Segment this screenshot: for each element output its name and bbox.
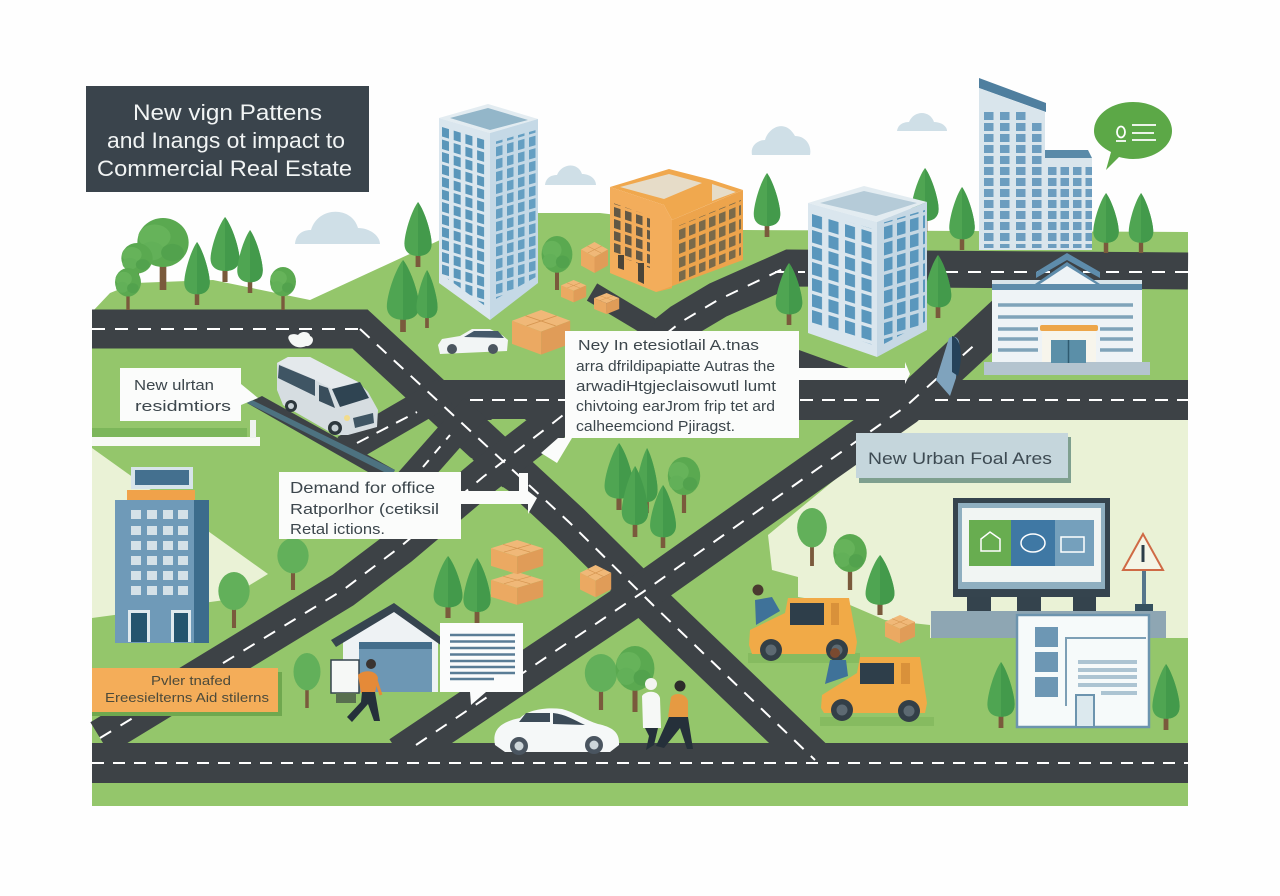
- figure by the road: [936, 336, 961, 396]
- road network: [92, 268, 1188, 763]
- document building: [1017, 615, 1149, 727]
- building: civic hall: [984, 253, 1150, 375]
- callout: new urban residents: [120, 368, 258, 421]
- label: orange residential note: Ereesielterns Aid stilerns: [105, 690, 270, 705]
- label: orange residential note: Pvler tnafed: [151, 673, 231, 688]
- building: orange block: [610, 169, 743, 292]
- callout: centre text: arra dfrildipapiatte Autras the: [576, 358, 775, 375]
- pale zone: right: [768, 420, 1188, 638]
- label: orange residential note: [92, 668, 282, 716]
- overpass ramp: [92, 396, 395, 476]
- white car: lower: [494, 708, 619, 755]
- warning sign: [1123, 534, 1163, 611]
- label: new urban focal areas: [856, 433, 1071, 483]
- callout: new urban residents: New ulrtan: [134, 377, 214, 394]
- loader: upper: [748, 584, 860, 663]
- building: top right tower: [979, 78, 1092, 250]
- callout: demand for office: Ratporlhor (cetiksil: [290, 501, 439, 518]
- callout: demand for office: [279, 472, 537, 539]
- white car: upper: [438, 329, 508, 354]
- building: blue tower left: [439, 104, 538, 320]
- house with garage: [331, 603, 442, 703]
- cardboard boxes: upper: [512, 242, 619, 355]
- callout: centre text: chivtoing earJrom frip tet ard: [576, 398, 775, 415]
- trees: lower right: [585, 508, 1180, 730]
- building: glass tower centre: [808, 186, 927, 357]
- label: new urban focal areas: New Urban Foal Ares: [868, 449, 1052, 468]
- callout: centre text: arwadiHtgjeclaisowutl lumt: [576, 378, 777, 395]
- callout: centre text: [541, 331, 910, 463]
- title panel: Commercial Real Estate: [97, 156, 352, 181]
- billboard: [931, 498, 1166, 638]
- green road islands: [373, 370, 547, 493]
- person walking with orange shirt: [347, 659, 381, 722]
- clouds: [295, 113, 947, 244]
- document callout: [440, 623, 523, 705]
- callout: centre text: calheemciond Pjiragst.: [576, 418, 735, 435]
- speech bubble icon: [1094, 102, 1172, 170]
- title panel: New vign Pattens: [133, 100, 322, 125]
- callout: new urban residents: residmtiors: [135, 398, 231, 415]
- pale zone: left: [92, 448, 268, 618]
- cardboard boxes: lower: [491, 540, 915, 644]
- trees: upper centre and right: [387, 168, 1153, 332]
- building: left office: [115, 467, 209, 643]
- loader: lower: [820, 648, 934, 726]
- van: [277, 332, 378, 435]
- trees: centre cluster: [605, 443, 700, 548]
- callout: demand for office: Retal ictions.: [290, 521, 385, 538]
- trees: top left grove: [115, 217, 296, 310]
- title panel: [86, 86, 369, 192]
- map ground: [92, 213, 1188, 806]
- title panel: and Inangs ot impact to: [107, 128, 345, 153]
- callout: centre text: Ney In etesiotlail A.tnas: [578, 337, 759, 354]
- callout: demand for office: Demand for office: [290, 480, 435, 497]
- trees: lower left: [218, 538, 491, 708]
- pedestrians: [642, 678, 693, 750]
